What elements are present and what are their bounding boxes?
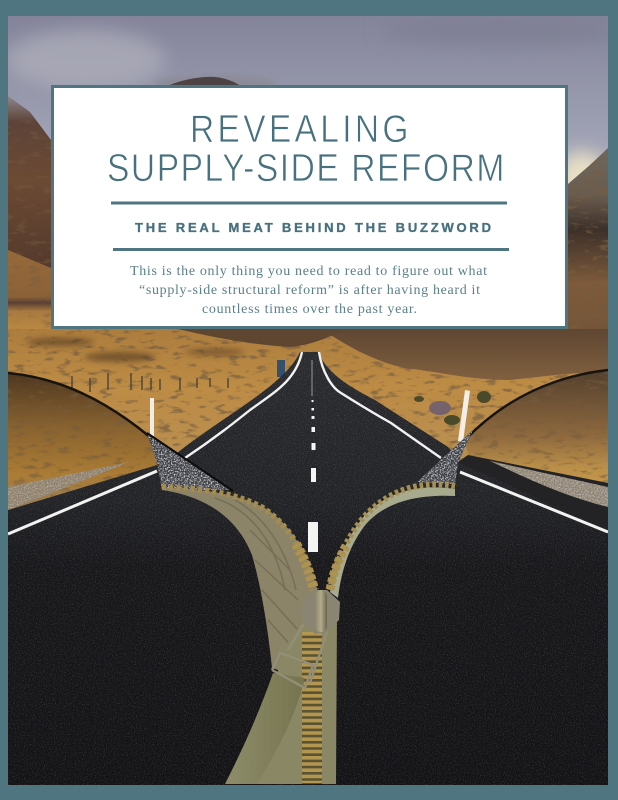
slider — [301, 590, 340, 634]
closed lower zipper — [257, 622, 337, 784]
left orange lower slope — [8, 250, 51, 335]
title — [107, 107, 504, 190]
title panel — [52, 86, 566, 328]
top rule — [111, 202, 507, 204]
zipper — [162, 484, 455, 784]
title: REVEALING — [190, 107, 408, 151]
blue road sign — [277, 360, 285, 377]
centre dashes — [308, 360, 318, 552]
description — [130, 264, 487, 317]
gravel verge right — [488, 459, 608, 509]
shadow under teeth — [302, 632, 322, 784]
right peeled flap — [458, 368, 608, 530]
right mountain — [568, 148, 608, 329]
golden valley ground — [8, 329, 608, 529]
gravel verge left — [8, 460, 132, 512]
description: “supply-side structural reform” is after having heard it — [139, 283, 480, 298]
fence posts left — [72, 373, 228, 392]
subtitle: THE REAL MEAT BEHIND THE BUZZWORD — [135, 220, 491, 235]
herringbone weave — [215, 498, 298, 650]
distant dark peak — [155, 76, 274, 85]
pull tab — [225, 673, 305, 784]
closed teeth — [302, 632, 322, 783]
road surface — [8, 340, 608, 785]
sky with clouds — [8, 16, 608, 184]
title: SUPPLY-SIDE REFORM — [107, 146, 504, 190]
right zipper teeth — [330, 484, 455, 590]
right gravel wedge — [417, 430, 473, 484]
left gravel wedge — [145, 430, 237, 492]
right zipper fabric — [330, 487, 455, 598]
left far hill shadow — [178, 329, 345, 347]
bottom rule — [113, 248, 509, 251]
road markings — [8, 352, 608, 534]
description: countless times over the past year. — [202, 302, 417, 317]
roadside shrubs — [414, 391, 491, 425]
left zipper fabric — [162, 488, 318, 676]
far right brown hills — [322, 329, 608, 380]
white marker post right — [458, 390, 470, 442]
tab metal loop — [271, 623, 328, 690]
description: This is the only thing you need to read to figure out what — [130, 264, 487, 279]
left mountain — [8, 96, 51, 270]
left zipper teeth — [162, 487, 315, 590]
dark clumps on left field — [26, 338, 245, 362]
left peeled flap — [8, 370, 158, 515]
white marker post left — [150, 398, 154, 436]
